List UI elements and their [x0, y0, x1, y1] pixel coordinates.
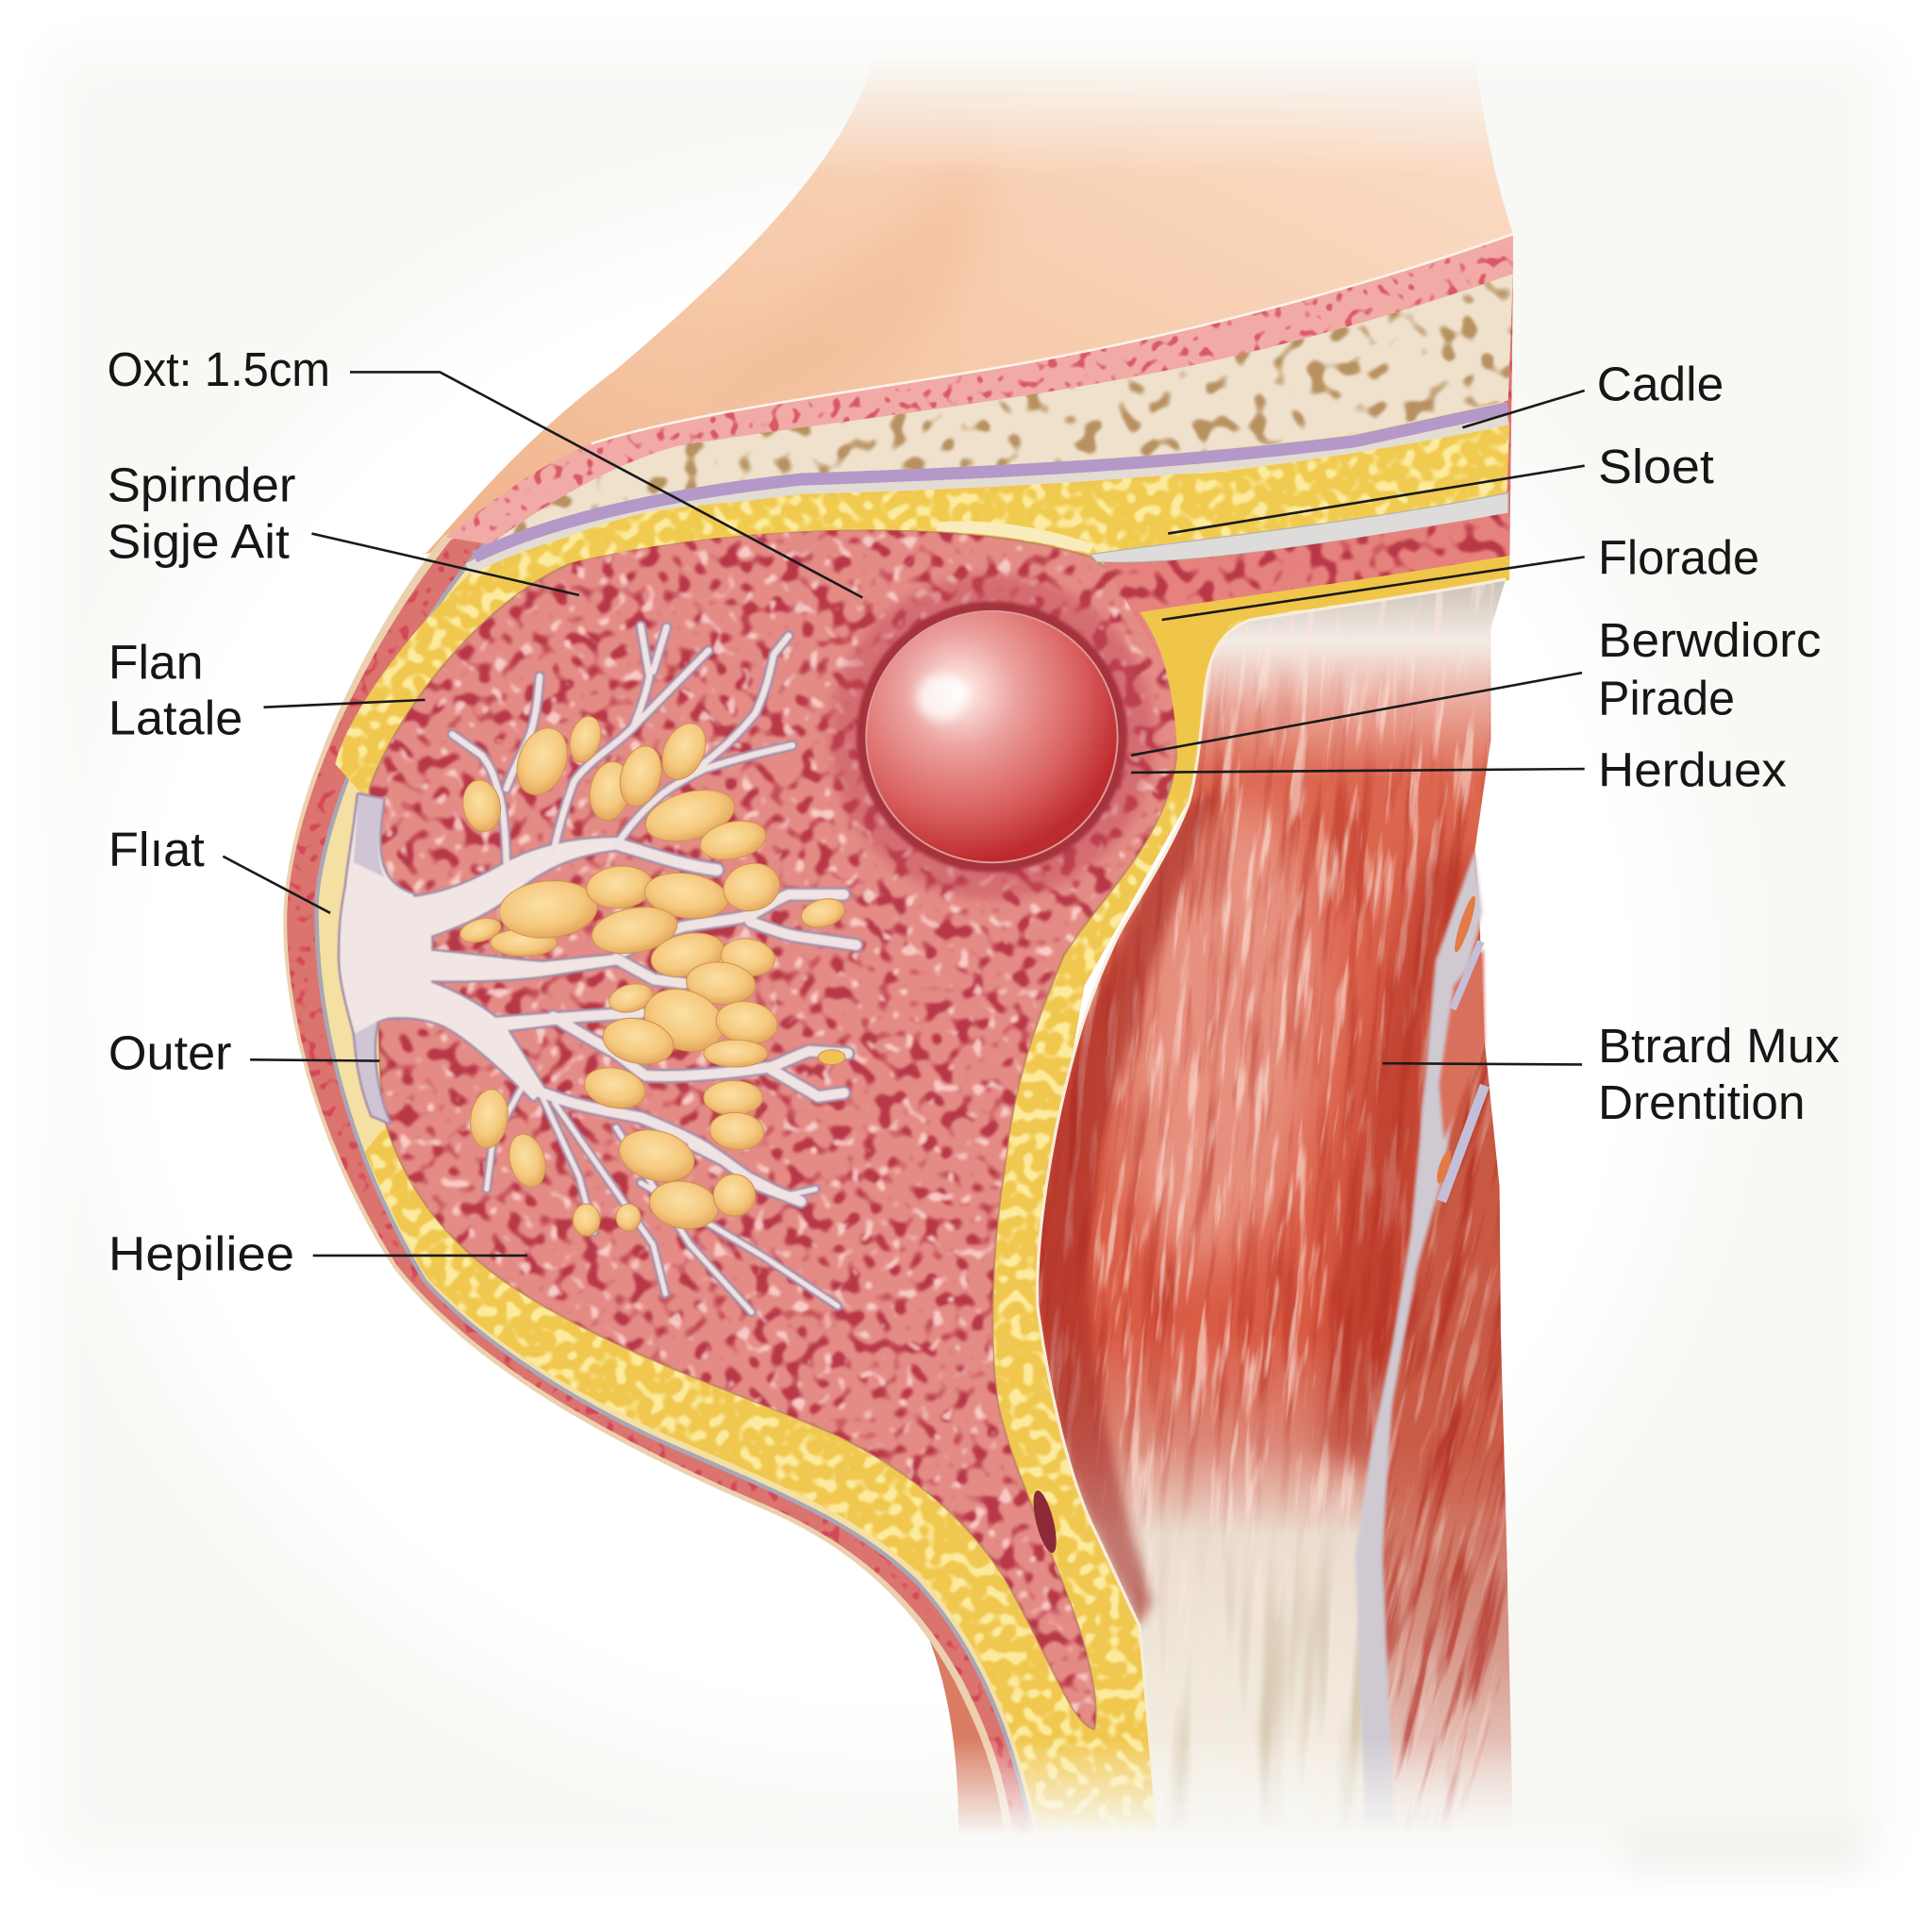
- label: Hepiliee: Hepiliee: [108, 1227, 294, 1281]
- anatomical illustration: [283, 74, 1513, 1831]
- vessel: [1029, 1489, 1061, 1555]
- neck skin: [425, 37, 1513, 555]
- label: Spirnder Sigje Ait: [108, 458, 579, 595]
- label: Sloet: [1168, 440, 1714, 534]
- label: Florade: Florade: [1598, 531, 1759, 585]
- left shade: [1037, 789, 1220, 1626]
- label: Oxt: Oxt: 1.5cm: [108, 342, 330, 396]
- pale centre: [1097, 791, 1342, 1278]
- ducts and nipple: [340, 626, 857, 1312]
- label: Oxt: [108, 342, 862, 597]
- label: Florade: [1162, 531, 1759, 620]
- label: Berwdiorc Pirade: [1131, 613, 1821, 756]
- breast tissue: [370, 530, 1177, 1728]
- label: Btrard Mux Drentition: Drentition: [1598, 1075, 1805, 1129]
- yellow fat band: [492, 425, 1509, 579]
- connective cream layer: [317, 370, 1509, 1836]
- foam adipose band: [487, 274, 1513, 551]
- label: Sloet: Sloet: [1598, 440, 1714, 493]
- fibres: [891, 502, 1674, 1932]
- label: Flan Latale: [108, 636, 425, 744]
- lobules: [458, 713, 848, 1236]
- red muscle fascia band: [1103, 512, 1509, 665]
- subcutaneous fat: [335, 468, 1356, 1836]
- label: Flan Latale: Flan: [108, 636, 204, 690]
- label: Outer: Outer: [108, 1026, 232, 1080]
- label: Spirnder Sigje Ait: Spirnder: [108, 458, 296, 512]
- outer skin layer: [283, 274, 1513, 1836]
- thin yellow band: [1140, 556, 1509, 801]
- lower left muscle: [926, 1633, 1008, 1836]
- dermis layer: [287, 274, 1513, 1836]
- label: Herduex: [1131, 742, 1787, 796]
- purple fascia: [468, 408, 1508, 569]
- grey membrane: [1091, 492, 1508, 562]
- label: Flıat: Flıat: [108, 823, 205, 876]
- tumour mass: [829, 575, 1155, 899]
- label: Cadle: Cadle: [1597, 357, 1724, 410]
- label: Flan Latale: Latale: [108, 691, 242, 744]
- label: Btrard Mux Drentition: [1382, 1019, 1840, 1129]
- label: Btrard Mux Drentition: Btrard Mux: [1598, 1019, 1840, 1073]
- right shade: [1319, 850, 1474, 1474]
- label: Cadle: [1462, 357, 1724, 427]
- right muscle: [1203, 778, 1710, 1914]
- label: Spirnder Sigje Ait: Sigje Ait: [108, 515, 290, 569]
- label: Herduex: Herduex: [1598, 742, 1787, 796]
- main muscle: [891, 502, 1674, 1932]
- label: Berwdiorc Pirade: Pirade: [1598, 672, 1735, 725]
- side fascia and strips: [1356, 850, 1485, 1836]
- top skin band: [446, 234, 1513, 544]
- label: Berwdiorc Pirade: Berwdiorc: [1598, 613, 1821, 667]
- label: Flıat: [108, 823, 330, 913]
